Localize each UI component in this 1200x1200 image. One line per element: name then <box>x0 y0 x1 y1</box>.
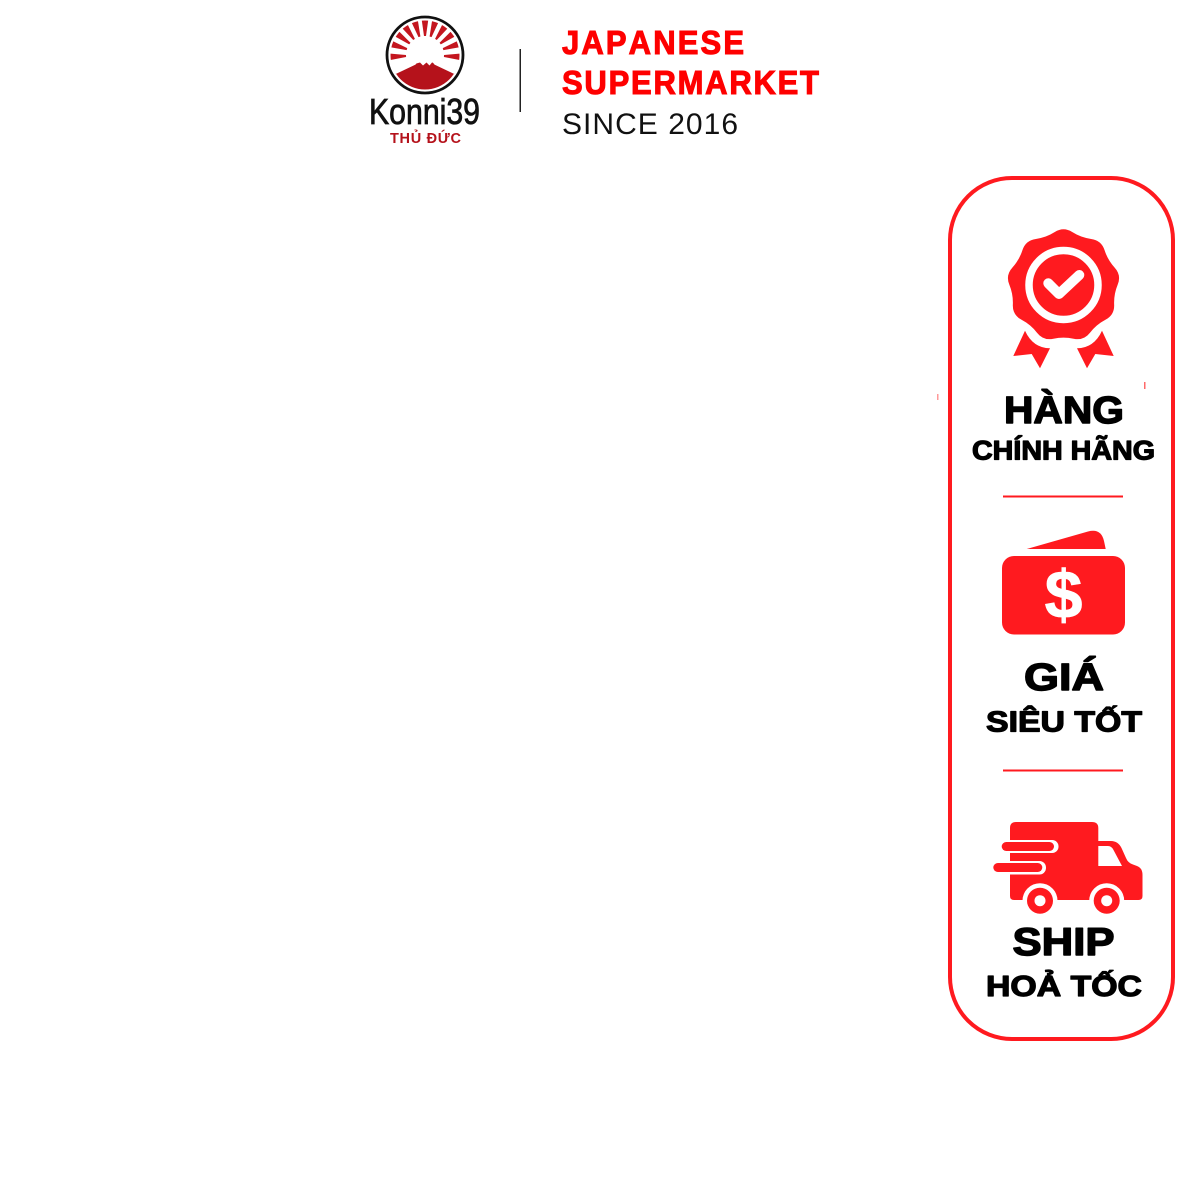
text: express shipping: HOẢ TỐC <box>986 969 1142 1003</box>
text: genuine goods <box>972 388 1155 466</box>
icon: money wallet: $ <box>1045 557 1082 633</box>
text: genuine goods: HÀNG <box>1004 388 1124 432</box>
icon: delivery truck <box>985 822 1142 918</box>
text: express shipping <box>986 921 1142 1003</box>
brand name: Konni39 <box>369 91 480 132</box>
text: genuine goods: CHÍNH HÃNG <box>972 436 1155 466</box>
heading: Japanese supermarket since 2016: SINCE 2016 <box>562 108 738 141</box>
heading: Japanese supermarket since 2016: JAPANESE <box>562 24 744 61</box>
heading: Japanese supermarket since 2016: SUPERMARKET <box>562 64 819 101</box>
text: great price: SIÊU TỐT <box>986 704 1142 738</box>
branch name: THỦ ĐỨC <box>390 129 462 147</box>
panel: benefits <box>937 178 1173 1039</box>
icon: money wallet <box>1002 531 1125 634</box>
icon: rising sun and mountain emblem <box>385 17 465 100</box>
icon: certified badge <box>1008 229 1119 368</box>
text: great price <box>986 655 1142 738</box>
text: great price: GIÁ <box>1024 655 1104 699</box>
heading: Japanese supermarket since 2016 <box>562 24 819 141</box>
logo: Konni39 Thu Duc <box>369 17 480 147</box>
text: express shipping: SHIP <box>1012 921 1114 964</box>
